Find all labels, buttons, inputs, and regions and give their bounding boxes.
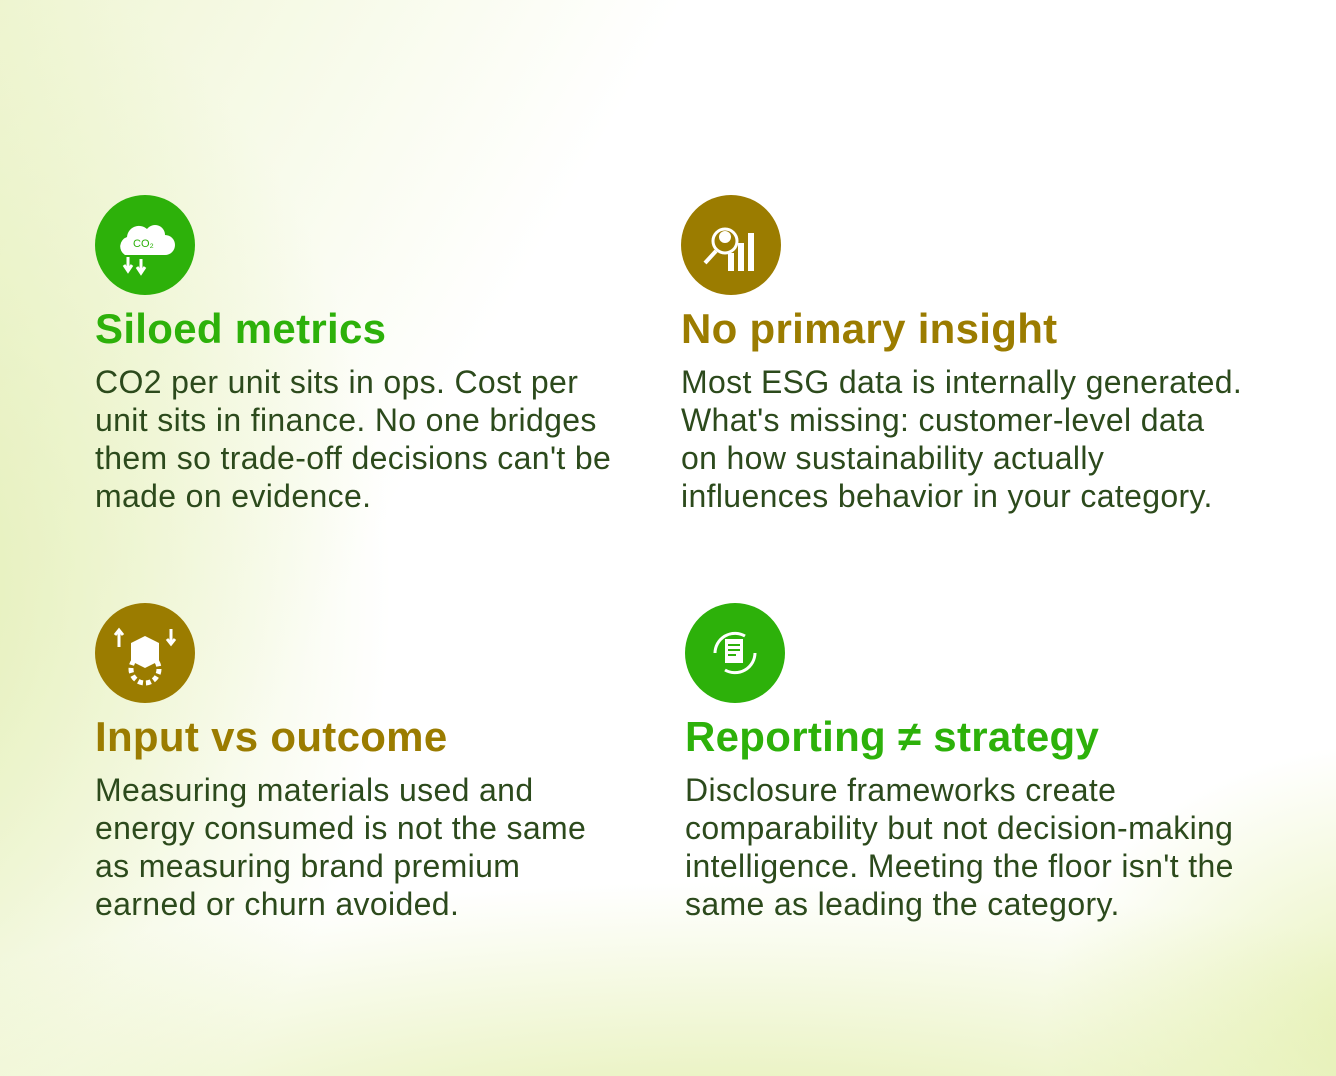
body text: intelligence. Meeting the floor isn't the — [685, 848, 1234, 884]
body text: earned or churn avoided. — [95, 886, 459, 922]
body text: Disclosure frameworks create — [685, 772, 1116, 808]
body text: comparability but not decision-making — [685, 810, 1233, 846]
body text: influences behavior in your category. — [681, 478, 1213, 514]
body text: CO2 per unit sits in ops. Cost per — [95, 364, 578, 400]
body text — [681, 364, 1242, 514]
heading: Siloed metrics — [95, 305, 386, 352]
panel: reporting not strategy — [685, 603, 1234, 922]
icon: report cycle — [685, 603, 785, 703]
icon: box and gear — [95, 603, 195, 703]
body text: What's missing: customer-level data — [681, 402, 1204, 438]
body text: as measuring brand premium — [95, 848, 520, 884]
body text: them so trade-off decisions can't be — [95, 440, 611, 476]
panel: input vs outcome — [95, 603, 586, 922]
body text: on how sustainability actually — [681, 440, 1104, 476]
body text: same as leading the category. — [685, 886, 1120, 922]
body text: Most ESG data is internally generated. — [681, 364, 1242, 400]
body text: Measuring materials used and — [95, 772, 533, 808]
icon: CO2 cloud: CO₂ — [133, 238, 154, 250]
icon: CO2 cloud — [95, 195, 195, 295]
body text — [95, 364, 611, 514]
panel: siloed metrics — [95, 195, 611, 514]
icon: insight chart — [681, 195, 781, 295]
body text: made on evidence. — [95, 478, 371, 514]
body text — [685, 772, 1234, 922]
body text: energy consumed is not the same — [95, 810, 586, 846]
body text: unit sits in finance. No one bridges — [95, 402, 597, 438]
body text — [95, 772, 586, 922]
heading: Input vs outcome — [95, 713, 448, 760]
heading: Reporting ≠ strategy — [685, 713, 1099, 760]
heading: No primary insight — [681, 305, 1057, 352]
panel: no primary insight — [681, 195, 1242, 514]
